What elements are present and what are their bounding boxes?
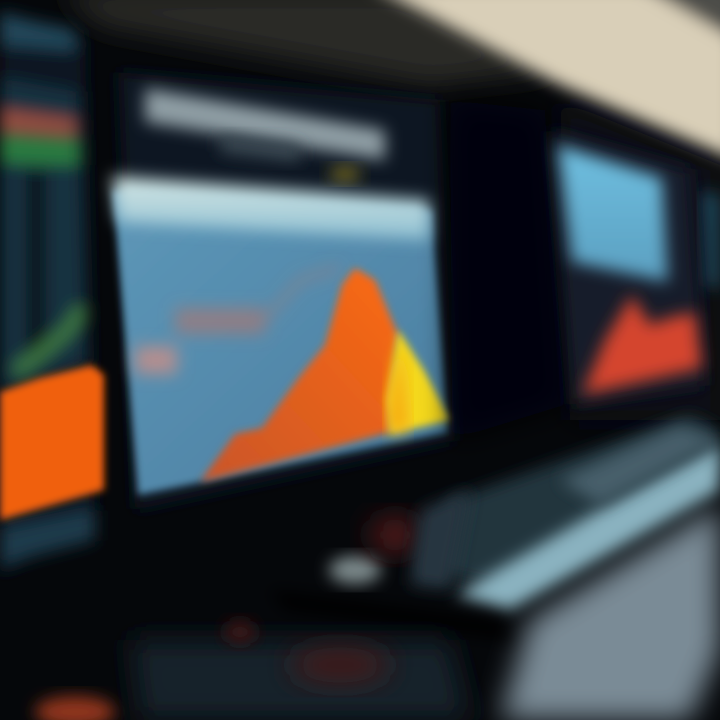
left monitor bezel [0,10,95,575]
left monitor title [0,14,75,50]
yellow triangle segment [386,330,450,434]
main monitor title [145,88,385,160]
far right screen [702,190,720,290]
right monitor red chart [582,295,702,395]
central dark column [450,100,565,440]
lower blue reflection [130,640,470,720]
ceiling light strip [370,0,720,160]
main monitor subtitle [220,135,300,162]
right monitor bezel [550,130,705,405]
main monitor bezel [118,72,455,510]
main screen header [112,176,430,240]
orange mountain chart [200,268,398,482]
panel: left monitor [0,10,95,575]
left monitor screen [0,78,85,390]
red reflection [290,647,390,683]
desk surface [500,505,720,720]
orange reflection bottom left [35,696,115,720]
keyboard [455,445,720,610]
reflection on desk [329,556,381,584]
main screen [113,190,448,495]
main chart labels [135,268,340,374]
keyboard front edge [270,590,510,640]
left lower labels [0,510,95,565]
panel: right monitor [550,130,720,405]
panel: lower reflections [35,620,470,720]
yellow marker [329,166,361,182]
left orange area [0,365,104,520]
panel: desk and keyboard [270,415,720,720]
top wall [60,0,720,420]
right monitor light blue screen [558,145,668,282]
panel: main monitor [112,72,455,510]
left chart bands [0,110,75,135]
left chart green line [15,308,82,372]
